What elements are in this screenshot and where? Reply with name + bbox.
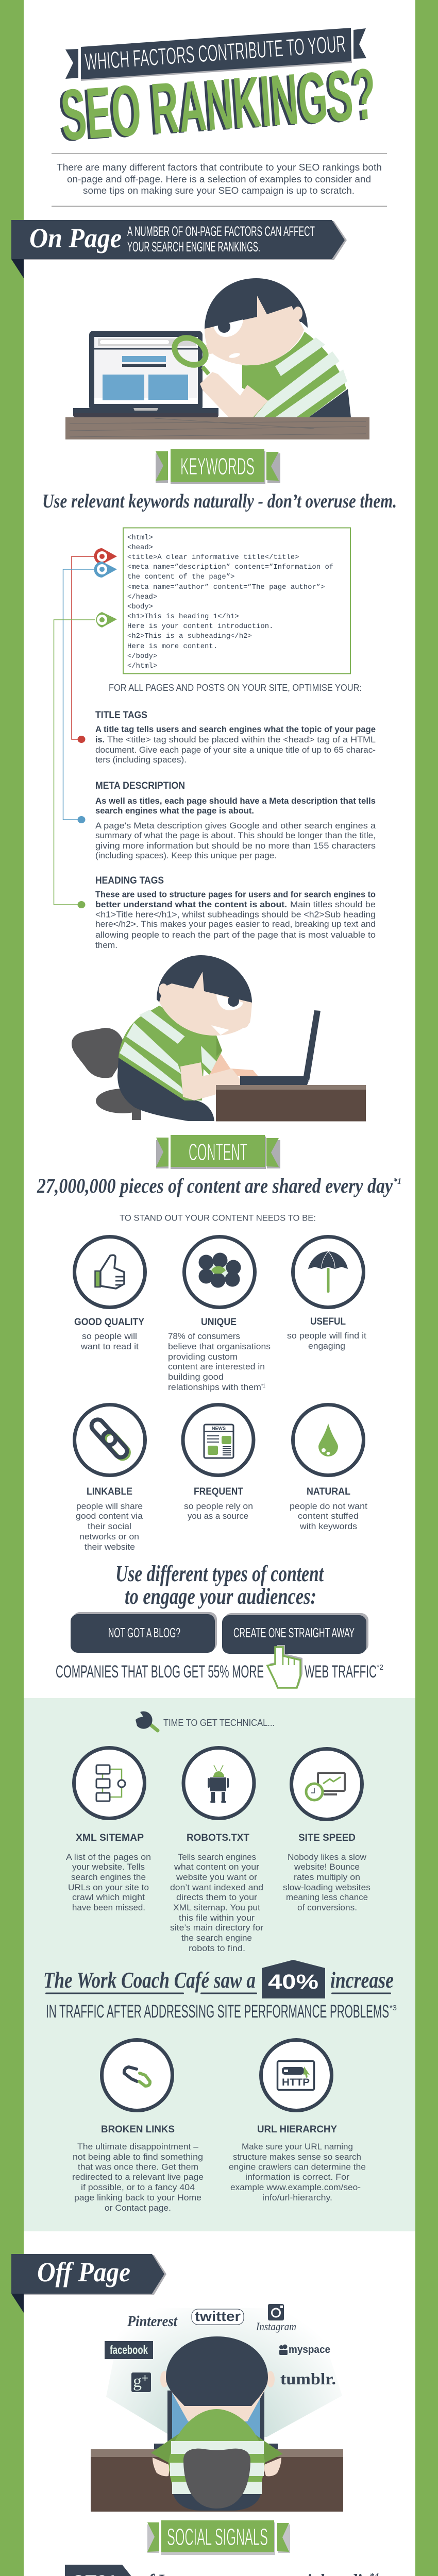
item: robots.txt: what content on your — [174, 1862, 259, 1872]
section ribbon: social signals: SOCIAL SIGNALS — [167, 2523, 268, 2550]
text block: title tags: is. — [95, 735, 105, 744]
item: site speed: SITE SPEED — [298, 1833, 356, 1843]
title ribbon — [65, 28, 366, 81]
stat: work coach cafe 40%: increase — [330, 1968, 394, 1993]
shirt — [119, 1006, 222, 1100]
code sample box: <html> — [127, 534, 153, 542]
button: not got a blog — [71, 1612, 217, 1653]
icon: wrench and magnifier — [136, 1711, 158, 1731]
code sample box: </head> — [127, 593, 157, 601]
button: create one straight away — [222, 1613, 368, 1654]
text block: meta description: giving more information but should be no more than 155 characters — [95, 841, 376, 851]
item: robots.txt: ROBOTS.TXT — [187, 1833, 249, 1843]
item: good quality — [74, 1236, 145, 1351]
sleeves — [151, 2429, 283, 2463]
desk — [65, 417, 369, 439]
icon: robot — [208, 1765, 229, 1803]
code sample box: <title>A clear informative title</title> — [127, 553, 299, 562]
stat: 67% use social media — [65, 2565, 379, 2576]
monitor — [154, 2391, 278, 2450]
On Page banner: On Page — [29, 223, 122, 253]
intro text: on-page and off-page. Here is a selection of examples to consider and — [67, 174, 371, 184]
item: linkable: good content via — [76, 1511, 143, 1521]
text block: heading tags — [95, 875, 376, 950]
item: robots.txt: XML sitemap. You put — [173, 1903, 260, 1912]
stat: companies that blog: COMPANIES THAT BLOG GET 55% MORE — [56, 1662, 264, 1682]
text block: heading tags: them. — [95, 941, 117, 950]
item: site speed: rates multiply on — [294, 1872, 360, 1882]
icon: newspaper: NEWS — [212, 1426, 226, 1431]
item: xml sitemap: search engines the — [71, 1872, 146, 1882]
logo: google plus — [131, 2371, 151, 2392]
item: url hierarchy: structure makes sense so search — [233, 2152, 361, 2162]
item: url hierarchy: information is correct. For — [245, 2172, 349, 2182]
logo: instagram: Instagram — [256, 2320, 296, 2333]
item: xml sitemap: A list of the pages on — [66, 1852, 151, 1862]
icon: http browser: HTTP — [282, 2077, 310, 2088]
screen light cone — [106, 2308, 342, 2437]
icon: water drop — [318, 1423, 338, 1456]
text block: title tags: document. Give each page of your site a unique title of up to 65 charac- — [95, 745, 376, 755]
icon: chain link — [89, 1417, 131, 1461]
text block: meta description: summary of what the page is about. This should be longer than the title, — [95, 831, 376, 840]
item: robots.txt: website you want or — [176, 1872, 257, 1882]
button: create one straight away: CREATE ONE STRAIGHT AWAY — [233, 1625, 355, 1640]
heading: use different types of content — [115, 1561, 324, 1609]
item: unique: *1 — [261, 1383, 265, 1389]
pants — [117, 1058, 214, 1121]
item: useful: engaging — [308, 1341, 345, 1351]
item: frequent: so people rely on — [184, 1501, 253, 1511]
code sample box: <h2>This is a subheading</h2> — [127, 632, 252, 640]
text block: meta description: As well as titles, each page should have a Meta description that tells — [95, 796, 376, 806]
item: unique: 78% of consumers — [168, 1331, 240, 1341]
logo: facebook — [105, 2341, 153, 2359]
section ribbon: keywords — [156, 449, 280, 484]
item: natural: with keywords — [299, 1521, 357, 1531]
item: site speed: meaning less chance — [286, 1892, 368, 1902]
logo: google plus: g — [133, 2372, 142, 2391]
item: useful: USEFUL — [310, 1316, 346, 1327]
text block: heading tags: These are used to structure pages for users and for search engines to — [95, 890, 376, 900]
item: xml sitemap — [66, 1748, 151, 1912]
code sample box: Here is more content. — [127, 642, 217, 651]
item: natural: content stuffed — [298, 1511, 359, 1521]
illustration: man looking at social networks — [91, 2304, 343, 2512]
face — [159, 972, 252, 1036]
code sample box: <h1>This is heading 1</h1> — [127, 613, 239, 621]
stat: work coach cafe 40% — [43, 1960, 397, 2022]
illustration: man inspecting a laptop with a magnifier — [65, 278, 369, 439]
code sample box: <meta name=”author” content=”The page author”> — [127, 583, 325, 591]
item: robots.txt: site’s main directory for — [170, 1923, 263, 1933]
item: good quality: so people will — [82, 1331, 137, 1341]
hair — [205, 278, 308, 330]
desk — [91, 2449, 343, 2512]
laptop — [240, 1010, 321, 1085]
button: not got a blog: NOT GOT A BLOG? — [108, 1625, 180, 1640]
item: natural: NATURAL — [307, 1486, 350, 1497]
logo: tumblr: tumblr. — [280, 2369, 336, 2388]
item: xml sitemap: your website. Tells — [72, 1862, 145, 1872]
On Page banner: YOUR SEARCH ENGINE RANKINGS. — [127, 239, 260, 255]
Off Page banner: Off Page — [37, 2257, 130, 2287]
item: robots.txt: the search engine — [181, 1933, 252, 1943]
pants — [173, 2494, 261, 2511]
text block: title tags — [95, 710, 376, 765]
code sample box: <meta name=”description” content=”Information of — [127, 563, 333, 571]
far arm — [210, 1054, 258, 1076]
item: url hierarchy: info/url-hierarchy. — [262, 2193, 332, 2202]
item: robots.txt: don’t want indexed and — [170, 1883, 263, 1892]
intro to icons: TO STAND OUT YOUR CONTENT NEEDS TO BE: — [120, 1213, 316, 1223]
hair — [166, 2336, 268, 2406]
icon: thumbs up — [95, 1255, 124, 1289]
text block: heading tags: Main titles should be — [290, 900, 376, 909]
heading: use different types of content: to engage your audiences: — [125, 1584, 316, 1609]
item: robots.txt — [170, 1748, 263, 1953]
item: robots.txt: Tells search engines — [178, 1852, 256, 1862]
item: robots.txt: this file within your — [179, 1913, 255, 1923]
magnifier — [170, 332, 211, 374]
text block: heading tags: here</h2>. This makes your pages easier to read, breaking up text and — [95, 920, 376, 929]
item: url hierarchy — [229, 2040, 366, 2202]
item: unique: providing custom — [168, 1352, 238, 1362]
item: linkable: LINKABLE — [87, 1486, 132, 1497]
text block: title tags: TITLE TAGS — [95, 710, 147, 721]
item: robots.txt: directs them to your — [176, 1892, 257, 1902]
blue connector — [63, 562, 117, 823]
text block: heading tags: <h1>Title here</h1>, whilst subheadings should be <h2>Sub heading — [95, 910, 376, 919]
item: linkable: networks or on — [79, 1532, 139, 1541]
text block: title tags: ters (including spaces). — [95, 755, 187, 765]
item: site speed: website! Bounce — [294, 1862, 360, 1872]
code sample box: the content of the page”> — [127, 573, 234, 581]
item: useful: so people will find it — [287, 1331, 366, 1341]
text block: meta description: search engines what the page is about. — [95, 806, 254, 816]
item: useful — [287, 1236, 366, 1351]
item: xml sitemap: XML SITEMAP — [76, 1833, 144, 1843]
intro text: some tips on making sure your SEO campaign is up to scratch. — [83, 185, 355, 196]
item: broken links: that was once there. Get them — [78, 2162, 198, 2172]
technical heading with wrench — [136, 1711, 275, 1731]
desk — [216, 1085, 366, 1121]
arm — [200, 372, 268, 417]
logo: myspace: myspace — [289, 2344, 330, 2355]
item: frequent: you as a source — [188, 1511, 248, 1521]
sleeve and near arm — [180, 1062, 240, 1100]
item: good quality: GOOD QUALITY — [74, 1317, 144, 1328]
item: broken links: or Contact page. — [105, 2203, 171, 2213]
stat: companies that blog: *2 — [377, 1663, 383, 1672]
illustration: man typing at a desk — [72, 955, 366, 1121]
green connector — [54, 612, 117, 908]
item: broken links: The ultimate disappointment – — [77, 2142, 199, 2151]
Off Page banner — [11, 2254, 166, 2313]
chair — [72, 1028, 149, 1120]
text block: meta description — [95, 781, 376, 860]
item: broken links: BROKEN LINKS — [101, 2124, 175, 2135]
item: unique — [168, 1236, 271, 1392]
icon: umbrella — [308, 1251, 348, 1293]
icon: sitemap — [96, 1765, 125, 1801]
stat: work coach cafe 40%: 40% — [268, 1971, 318, 1993]
item: unique: building good — [168, 1372, 224, 1382]
item: site speed: Nobody likes a slow — [288, 1852, 367, 1862]
item: unique: relationships with them — [168, 1382, 261, 1392]
item: natural: people do not want — [290, 1501, 367, 1511]
code sample box: <body> — [127, 603, 153, 611]
heading: use different types of content: Use different types of content — [115, 1561, 324, 1586]
text block: meta description: A page's Meta description gives Google and other search engines a — [95, 821, 376, 831]
section ribbon: content — [156, 1135, 280, 1169]
item: broken links — [72, 2040, 204, 2213]
text block: heading tags: allowing people to reach the part of the page that is most valuable to — [95, 930, 376, 940]
red connector — [72, 548, 117, 743]
item: url hierarchy: engine crawlers can determine the — [229, 2162, 366, 2172]
item: url hierarchy: URL HIERARCHY — [257, 2124, 337, 2135]
item: good quality: want to read it — [80, 1342, 139, 1351]
On Page banner — [11, 220, 347, 278]
item: unique: believe that organisations — [168, 1342, 271, 1351]
intro text: There are many different factors that contribute to your SEO rankings both — [57, 162, 382, 173]
shirt — [242, 332, 346, 417]
item: natural — [290, 1404, 367, 1531]
item: broken links: redirected to a relevant live page — [72, 2172, 204, 2182]
code sample box: </body> — [127, 652, 157, 660]
item: unique: content are interested in — [168, 1362, 265, 1371]
icon: monitor and clock — [306, 1773, 345, 1800]
item: linkable — [74, 1404, 145, 1552]
section ribbon: keywords: KEYWORDS — [180, 453, 255, 480]
laptop — [73, 331, 218, 417]
item: linkable: people will share — [76, 1501, 143, 1511]
connector lines and pins — [54, 548, 117, 908]
section ribbon: content: CONTENT — [189, 1139, 247, 1165]
panel: technical — [24, 1698, 415, 2231]
icon: broken link — [124, 2067, 150, 2086]
stat: companies that blog: WEB TRAFFIC — [305, 1662, 377, 1682]
shirt — [169, 2409, 265, 2494]
item: broken links: not being able to find something — [73, 2152, 203, 2162]
optimise heading: FOR ALL PAGES AND POSTS ON YOUR SITE, OPTIMISE YOUR: — [109, 683, 362, 693]
icon: newspaper — [204, 1425, 233, 1458]
text block: meta description: META DESCRIPTION — [95, 781, 185, 791]
item: xml sitemap: crawl which might — [72, 1892, 145, 1902]
section ribbon: social signals — [147, 2520, 290, 2555]
logo: pinterest: Pinterest — [127, 2313, 178, 2330]
logo: twitter: twitter — [195, 2309, 241, 2324]
code sample box: <head> — [127, 544, 153, 552]
code sample box: </html> — [127, 662, 157, 670]
item: xml sitemap: have been missed. — [72, 1903, 145, 1912]
item: site speed: of conversions. — [297, 1903, 357, 1912]
hair — [157, 955, 252, 1003]
stat: 27,000,000 pieces: *1 — [393, 1176, 401, 1186]
stat: work coach cafe 40%: The Work Coach Café saw a — [43, 1968, 256, 1993]
item: url hierarchy: example www.example.com/seo- — [230, 2182, 361, 2192]
icon: cluster of dots — [199, 1253, 241, 1288]
item: broken links: page linking back to your Home — [74, 2193, 201, 2202]
item: linkable: their website — [85, 1542, 135, 1552]
stat: work coach cafe 40%: *3 — [390, 2004, 397, 2012]
text block: meta description: (including spaces). Keep this unique per page. — [95, 851, 277, 860]
code sample box: Here is your content introduction. — [127, 622, 273, 631]
face — [205, 296, 304, 365]
intro text — [57, 162, 382, 196]
item: site speed — [283, 1749, 370, 1912]
item: robots.txt: robots to find. — [189, 1943, 245, 1953]
item: frequent — [183, 1404, 254, 1521]
text block: heading tags: better understand what the content is about. — [95, 900, 287, 909]
text block: title tags: The <title> tag should be placed within the <head> tag of a HTML — [107, 735, 376, 744]
icon: http browser — [277, 2061, 314, 2090]
chair — [183, 2449, 250, 2509]
technical heading with wrench: TIME TO GET TECHNICAL... — [163, 1718, 275, 1728]
icon: hand cursor — [267, 1645, 302, 1688]
logo: facebook: facebook — [110, 2343, 148, 2357]
item: site speed: slow-loading websites — [283, 1883, 370, 1892]
item: frequent: FREQUENT — [194, 1486, 243, 1497]
logo: google plus: + — [142, 2371, 148, 2384]
logo: instagram — [256, 2304, 296, 2333]
item: broken links: if possible, or to a fancy 404 — [81, 2182, 195, 2192]
ears and neck — [160, 2371, 275, 2421]
item: xml sitemap: URLs on your site to — [68, 1883, 149, 1892]
text block: heading tags: HEADING TAGS — [95, 875, 164, 886]
item: unique: UNIQUE — [201, 1317, 237, 1328]
text block: title tags: A title tag tells users and search engines what the topic of your page — [95, 725, 376, 734]
code sample box — [123, 528, 350, 674]
item: linkable: their social — [88, 1521, 131, 1531]
arms — [153, 2458, 281, 2476]
item: url hierarchy: Make sure your URL naming — [242, 2142, 353, 2151]
